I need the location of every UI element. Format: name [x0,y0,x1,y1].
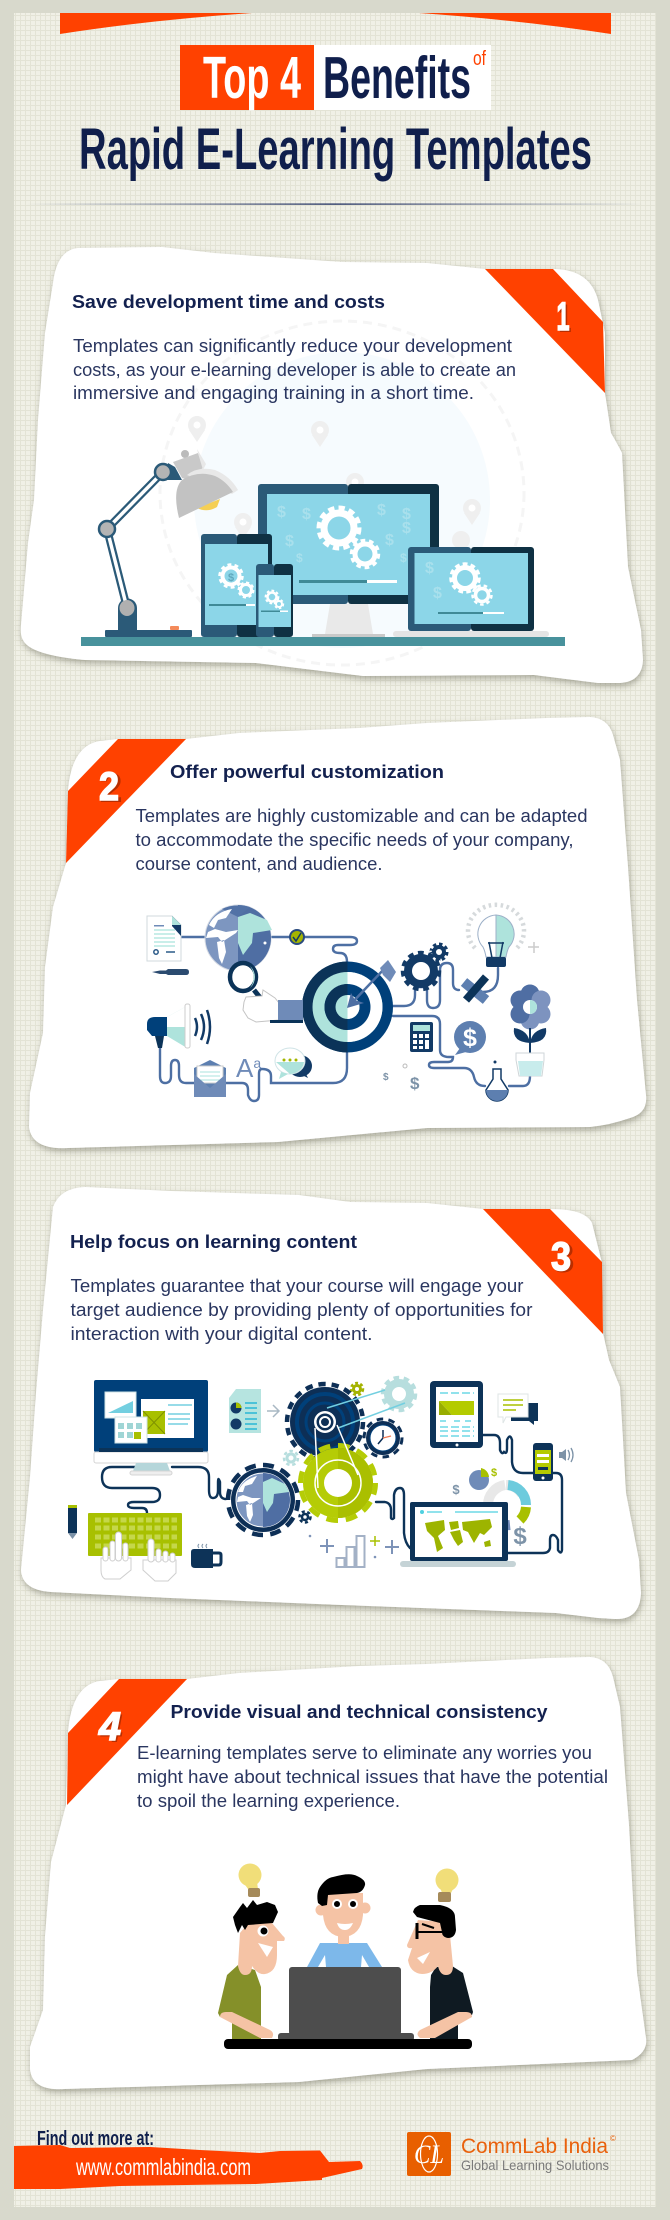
clock gear [364,1419,402,1457]
desktop monitor: $ [302,506,311,523]
number ribbon 4: 4 [100,1707,123,1751]
icon: donut chart [488,1485,526,1525]
desk [81,637,565,646]
number ribbon 1 [485,269,605,393]
desktop monitor [258,484,439,637]
footer [14,2128,616,2189]
desktop monitor: $ [361,547,369,562]
icon: envelope [194,1060,226,1097]
tablet [201,534,272,637]
body text 2: course content, and audience. [136,854,382,874]
body text 3: target audience by providing plenty of opportunities for [70,1300,532,1320]
body text 3: interaction with your digital content. [70,1324,372,1344]
card background 2 [29,717,646,1148]
number ribbon 3: 3 [551,1234,575,1281]
panel: benefit 2 [29,717,646,1148]
big dark gear [287,1384,363,1460]
tablet: $ [228,572,234,584]
desktop monitor: $ [296,551,303,565]
icon: report document [229,1389,261,1433]
laptop: $ [425,560,434,577]
icon: tools [464,977,486,1000]
logo: CommLab India [407,2132,616,2176]
icon: keyboard and hands [88,1513,182,1581]
arrow [267,1405,279,1417]
icon: tablet [430,1381,483,1448]
icon: dollar bubble: $ [463,1024,477,1052]
desktop monitor: $ [400,551,407,565]
icon: document and pen [147,916,189,975]
laptop: $ [433,585,442,602]
globe gear [228,1465,298,1535]
number ribbon 2: 2 [99,765,119,809]
title badge: Benefits of [314,45,491,111]
person: centre [307,1874,382,1967]
icon: dollar signs: $ [491,1467,497,1479]
desktop monitor: $ [402,506,411,523]
orange brush banner with URL: www.commlabindia.com [75,2154,251,2180]
icon: smartphone and speaker [533,1443,573,1481]
icon: mechanism of gears [228,1378,415,1535]
icon: dollar signs [383,1064,420,1093]
body text 2: Templates are highly customizable and can be adapted [136,806,588,826]
logo mark: CL [414,2140,444,2169]
illustration: gears and digital devices [68,1378,573,1581]
number ribbon 3: 3 [551,1235,571,1279]
phone [256,564,293,637]
table [224,2039,472,2049]
icon: check mark [290,930,304,944]
logo tagline: Global Learning Solutions [461,2157,609,2173]
number ribbon 1: 1 [556,295,570,339]
icon: light bulb [468,905,539,967]
top ribbon [60,13,611,34]
heading 2: Offer powerful customization [170,762,444,782]
desktop monitor: $ [377,502,386,519]
desk lamp [99,449,238,637]
icon: speech bubbles [275,1048,312,1079]
body text 3: Templates guarantee that your course will engage your [70,1276,524,1296]
heading 3: Help focus on learning content [70,1232,357,1252]
icon: flask [486,1060,508,1101]
icon: calculator [410,1022,433,1052]
icon: laptop with world map [400,1502,516,1567]
card background 3 [21,1187,641,1619]
illustration: customization target diagram [147,905,550,1101]
desktop monitor: $ [402,520,411,537]
icon: chat bubbles [498,1394,538,1425]
desktop monitor: $ [277,504,286,521]
card background 1 [21,247,643,683]
text icon: Aa: A [236,1053,254,1083]
title badge: Top 4 [180,45,314,111]
icon: bar chart with sparkles [309,1535,399,1567]
number ribbon 2 [66,739,186,863]
footer label: Find out more at: [37,2128,154,2150]
icon: dollar signs: $ [513,1523,527,1550]
laptop: $ [461,571,470,588]
icon: megaphone [147,1004,210,1048]
icon: coffee mug [191,1544,221,1568]
body text 2: to accommodate the specific needs of your company, [136,830,574,850]
icon: pie chart [469,1468,489,1490]
title badge: Benefits of: Benefits [323,45,471,111]
title badge: Top 4: Top 4 [203,45,301,111]
icon: target with arrow [302,960,396,1052]
logo name: CommLab India [461,2135,608,2158]
panel: benefit 3 [21,1187,641,1619]
number ribbon 4: 4 [98,1705,121,1749]
body text 1: immersive and engaging training in a short time. [73,383,474,403]
icon: desktop monitor with windows [94,1380,208,1475]
laptop [393,547,549,637]
desktop monitor: $ [333,519,345,541]
body text 1: costs, as your e-learning developer is able to create an [73,360,516,380]
heading 4: Provide visual and technical consistency [170,1702,548,1722]
number ribbon 4 [67,1679,187,1805]
faint world background [160,321,524,665]
orange brush banner with URL [14,2145,363,2189]
body text 1: Templates can significantly reduce your development [73,336,512,356]
body text 1 [73,336,516,403]
icon: globe [205,905,272,971]
number ribbon 2: 2 [99,764,123,811]
number ribbon 3 [483,1209,603,1334]
number ribbon 1: 1 [558,297,572,341]
text icon: Aa: a [253,1055,261,1071]
panel: benefit 1 [21,247,643,683]
icon: dollar signs [452,1467,527,1550]
illustration: devices and desk lamp [81,449,565,646]
icon: dollar bubble [454,1021,486,1055]
heading 1: Save development time and costs [72,292,385,312]
card background 4 [30,1657,646,2089]
icon: gears [403,944,447,989]
light bulb right [436,1868,458,1902]
title [79,45,592,182]
body text 4: might have about technical issues that have the potential [137,1767,608,1787]
registered mark: © [610,2134,616,2143]
body text 3 [70,1276,532,1344]
logo mark [407,2132,451,2176]
desktop monitor: $ [285,533,294,550]
light bulb left [238,1864,262,1897]
connecting wires [102,1435,562,1553]
icon: dollar signs: $ [452,1482,460,1497]
body text 4 [137,1743,608,1811]
body text 4: E-learning templates serve to eliminate any worries you [137,1743,592,1763]
icon: flower in pot [510,984,550,1076]
icon: dollar signs: $ [410,1074,420,1093]
body text 4: to spoil the learning experience. [137,1791,400,1811]
person: right with glasses and bulb [407,1868,473,2039]
title badge: Benefits of: of [473,48,486,70]
connecting wires [160,937,530,1101]
body text 2 [136,806,588,874]
illustration: three people at a laptop [218,1864,473,2049]
person: left with light bulb [218,1864,285,2039]
laptop [278,1967,414,2041]
icon: pencil [68,1505,77,1539]
panel: benefit 4 [30,1657,646,2089]
green gear [300,1425,376,1520]
icon: magnifier and hand [230,963,303,1023]
desktop monitor: $ [385,532,394,549]
icon: dollar signs: $ [383,1072,389,1083]
